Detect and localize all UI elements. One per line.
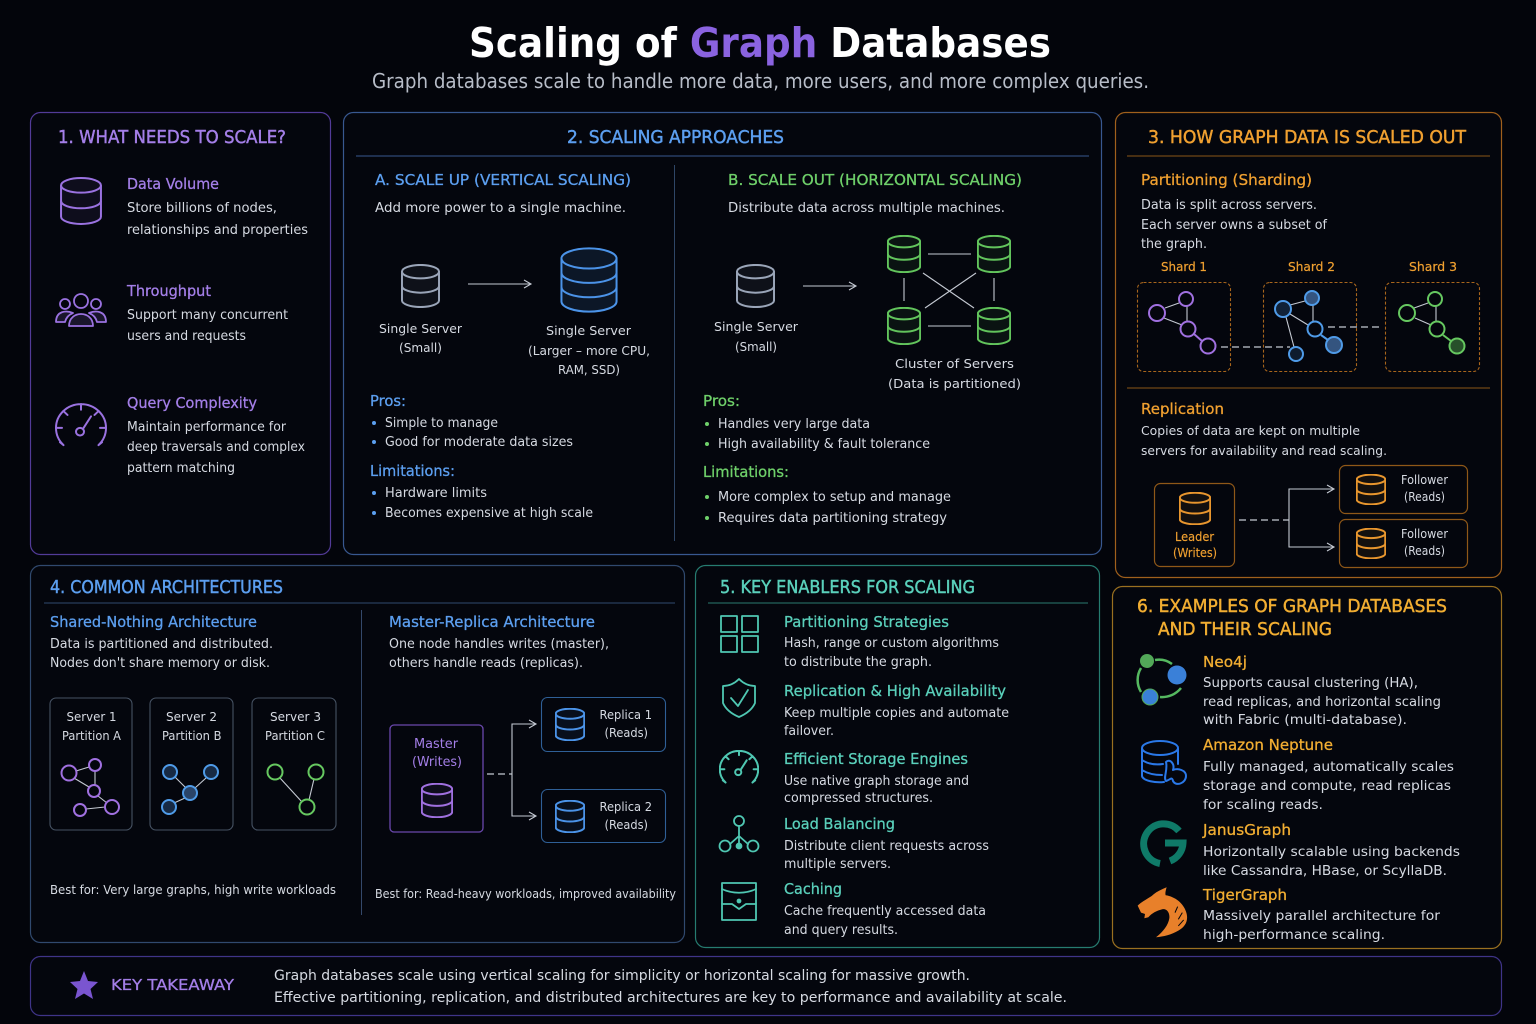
text block: query complexity [127, 394, 305, 476]
list: scale out limitations: Limitations: [703, 463, 789, 481]
node: replica 1: (Reads) [604, 725, 648, 740]
text block: storage engines: Use native graph storage and [784, 773, 969, 789]
text block: storage engines [784, 750, 969, 806]
label: cluster: Cluster of Servers [895, 356, 1014, 371]
heading: scaling approaches: 2. SCALING APPROACHES [567, 128, 784, 148]
text block: load balancing [784, 815, 989, 872]
text block: janusgraph: like Cassandra, HBase, or ScyllaDB. [1203, 863, 1447, 879]
text block: partitioning strategies: to distribute the graph. [784, 654, 932, 670]
heading: examples: 6. EXAMPLES OF GRAPH DATABASES [1137, 597, 1447, 617]
diagram: shards [1138, 259, 1480, 372]
label: large server: (Larger – more CPU, [528, 343, 650, 358]
text block: replication and HA: Replication & High Availability [784, 682, 1006, 700]
node: replica 1: Replica 1 [600, 707, 652, 722]
text block: replication and HA [784, 682, 1009, 739]
label: cluster: (Data is partitioned) [888, 376, 1021, 391]
subpanel: scale up [370, 171, 650, 521]
list: scale up limitations: Hardware limits [385, 485, 487, 501]
icon: grid [721, 616, 758, 652]
text block: caching: Cache frequently accessed data [784, 903, 986, 919]
list: scale out pros [703, 392, 930, 452]
heading: scale up: A. SCALE UP (VERTICAL SCALING) [375, 171, 631, 189]
text block: load balancing: multiple servers. [784, 856, 891, 872]
text block: throughput: Support many concurrent [127, 307, 288, 323]
graph: shard 3 [1399, 292, 1464, 354]
card: server 3 [252, 698, 336, 830]
card: server 3: Partition C [265, 728, 325, 743]
text block: throughput: Throughput [126, 282, 211, 300]
icon: tigergraph [1138, 887, 1187, 937]
list: scale up pros: Simple to manage [385, 415, 498, 431]
node: master: Master [414, 736, 458, 752]
text block: shared-nothing: Data is partitioned and distributed. [50, 636, 273, 652]
arrow: leader to followers [1239, 485, 1334, 551]
node: leader: Leader [1175, 529, 1215, 544]
text block: neo4j: Neo4j [1203, 653, 1247, 671]
diagram: leader and followers [1154, 466, 1468, 568]
node: replica 2: (Reads) [604, 817, 648, 832]
heading: examples: AND THEIR SCALING [1158, 620, 1332, 640]
text block: replication and HA: failover. [784, 723, 834, 739]
list: scale up limitations: Becomes expensive at high scale [385, 505, 593, 521]
icon: amazon neptune [1142, 741, 1186, 784]
label: small server: (Small) [399, 340, 442, 355]
panel: scaling approaches [344, 112, 1102, 554]
node: replica 2 [542, 790, 666, 842]
list: scale up limitations: Limitations: [370, 462, 455, 480]
text block: tigergraph: TigerGraph [1202, 886, 1287, 904]
icon: users [56, 294, 106, 326]
text block: master-replica: others handle reads (replicas). [389, 655, 583, 671]
list: scale out pros: High availability & fault tolerance [718, 436, 930, 452]
text block: data volume: Store billions of nodes, [127, 200, 277, 216]
text block: takeaway: Graph databases scale using vertical scaling for simplicity or horizontal scaling for massive growth. [274, 968, 970, 984]
note: master-replica best for: Best for: Read-heavy workloads, improved availability [375, 886, 677, 901]
text block: data volume [127, 175, 308, 238]
node: follower 2: Follower [1401, 527, 1448, 541]
text block: master-replica [389, 613, 609, 671]
icon: load balancer [720, 816, 758, 852]
text block: neo4j [1203, 653, 1441, 728]
list: scale up limitations [370, 462, 593, 521]
node: replica 1 [542, 698, 666, 752]
list: scale out limitations [703, 463, 951, 526]
text block: query complexity: Query Complexity [127, 394, 257, 412]
text block: replication and HA: Keep multiple copies and automate [784, 705, 1009, 721]
card: server 2 [150, 698, 233, 830]
panel: common architectures [30, 566, 684, 942]
text block: amazon neptune: Amazon Neptune [1203, 736, 1333, 754]
arrow: master to replicas [487, 720, 536, 820]
node: follower 2: (Reads) [1404, 544, 1445, 558]
text block: tigergraph: Massively parallel architecture for [1203, 908, 1440, 924]
icon: cache [722, 883, 756, 920]
text block: load balancing: Load Balancing [784, 815, 895, 833]
text block: partitioning strategies: Hash, range or custom algorithms [784, 635, 999, 651]
label: cluster [888, 356, 1021, 391]
node: master: (Writes) [412, 754, 462, 770]
list: scale up pros: Pros: [370, 392, 406, 410]
text block: partitioning: Each server owns a subset of [1141, 217, 1328, 233]
title: Scaling of Graph Databases [469, 19, 1051, 67]
heading: key takeaway: KEY TAKEAWAY [111, 976, 235, 994]
text block: partitioning: Data is split across servers. [1141, 197, 1317, 213]
icon: small server [737, 265, 774, 307]
text block: takeaway: Effective partitioning, replication, and distributed architectures are key to performance and availability at scale. [274, 990, 1067, 1006]
list: scale up pros: Good for moderate data sizes [385, 434, 573, 450]
list: scale up pros [370, 392, 573, 450]
text block: storage engines: Efficient Storage Engines [784, 750, 968, 768]
node: leader [1154, 484, 1234, 566]
heading: key enablers: 5. KEY ENABLERS FOR SCALING [720, 578, 975, 598]
card: server 2: Partition B [162, 728, 222, 743]
text block: shared-nothing: Shared-Nothing Architecture [50, 613, 257, 631]
node: follower 1: (Reads) [1404, 490, 1445, 504]
text block: load balancing: Distribute client requests across [784, 838, 989, 854]
text: scale up description: Add more power to a single machine. [375, 200, 626, 216]
text block: replication: servers for availability and read scaling. [1141, 443, 1387, 458]
text block: partitioning strategies: Partitioning Strategies [784, 613, 949, 631]
text block: partitioning [1141, 171, 1328, 252]
text block: partitioning: Partitioning (Sharding) [1141, 171, 1312, 189]
text block: neo4j: with Fabric (multi-database). [1203, 712, 1407, 728]
card: server 1 [50, 698, 132, 830]
text block: throughput: users and requests [127, 328, 246, 344]
icon: gauge [720, 751, 758, 783]
label: small server [714, 319, 799, 354]
graph: shard 2 [1275, 291, 1342, 361]
text: scale out description: Distribute data across multiple machines. [728, 200, 1005, 216]
list: scale out pros: Pros: [703, 392, 740, 410]
text block: tigergraph [1202, 886, 1440, 943]
text block: replication [1141, 400, 1387, 458]
label: small server: Single Server [714, 319, 799, 334]
label: small server [379, 321, 463, 355]
label: small server: (Small) [735, 339, 777, 354]
text block: janusgraph: Horizontally scalable using backends [1203, 844, 1460, 860]
card: server 1: Server 1 [66, 709, 116, 724]
text block: replication: Replication [1141, 400, 1224, 418]
text block: storage engines: compressed structures. [784, 790, 933, 806]
card: server 2: Server 2 [166, 709, 217, 724]
text block: neo4j: read replicas, and horizontal scaling [1203, 694, 1441, 710]
panel: key takeaway [30, 956, 1502, 1016]
icon: large server [561, 248, 617, 312]
list: scale out pros: Handles very large data [718, 416, 870, 432]
icon: gauge [56, 404, 106, 445]
icon: neo4j [1138, 654, 1186, 705]
panel: how graph data is scaled out [1116, 112, 1502, 578]
icon: shield [723, 679, 755, 717]
text block: takeaway [274, 968, 1067, 1006]
text block: caching: Caching [784, 880, 842, 898]
list: scale out limitations: More complex to setup and manage [718, 489, 951, 505]
text block: query complexity: pattern matching [127, 460, 235, 476]
node: follower 1 [1340, 466, 1468, 514]
heading: common architectures: 4. COMMON ARCHITECTURES [50, 578, 283, 598]
label: large server [528, 323, 650, 377]
text block: amazon neptune: Fully managed, automatically scales [1203, 759, 1454, 775]
text block: tigergraph: high-performance scaling. [1203, 927, 1385, 943]
text block: replication: Copies of data are kept on multiple [1141, 423, 1360, 438]
arrow: scale out [803, 282, 856, 290]
node: master [390, 725, 483, 832]
text block: amazon neptune [1203, 736, 1454, 813]
heading: examples [1137, 597, 1447, 640]
text block: partitioning: the graph. [1141, 236, 1207, 252]
diagram: server cluster [888, 236, 1010, 344]
note: shared-nothing best for: Best for: Very large graphs, high write workloads [50, 882, 336, 897]
text block: partitioning strategies [784, 613, 999, 670]
card: server 1: Partition A [62, 728, 121, 743]
text block: data volume: relationships and properties [127, 222, 308, 238]
icon: star [70, 971, 98, 999]
text block: janusgraph [1202, 821, 1460, 879]
list: scale out limitations: Requires data partitioning strategy [718, 510, 947, 526]
icon: small server [402, 265, 439, 307]
label: shard 1: Shard 1 [1161, 259, 1207, 274]
text block: master-replica: One node handles writes (master), [389, 636, 609, 652]
panel: examples of graph databases [1112, 586, 1502, 948]
label: large server: Single Server [546, 323, 632, 338]
subpanel: scale out [703, 171, 1022, 526]
node: leader: (Writes) [1173, 545, 1217, 560]
icon: database [61, 178, 101, 224]
node: follower 2 [1340, 520, 1468, 568]
text block: caching [784, 880, 986, 938]
panel: what needs to scale [30, 112, 330, 554]
node: replica 2: Replica 2 [600, 799, 652, 814]
text block: throughput [126, 282, 288, 344]
graph: shard 1 [1149, 292, 1216, 354]
text block: janusgraph: JanusGraph [1202, 821, 1291, 839]
text block: amazon neptune: for scaling reads. [1203, 797, 1323, 813]
text block: query complexity: deep traversals and complex [127, 439, 305, 455]
text block: caching: and query results. [784, 922, 898, 938]
subtitle: Graph databases scale to handle more data, more users, and more complex queries. [372, 69, 1149, 93]
text block: shared-nothing [50, 613, 273, 671]
card: server 3: Server 3 [270, 709, 321, 724]
heading: what needs to scale: 1. WHAT NEEDS TO SCALE? [58, 128, 286, 148]
text block: neo4j: Supports causal clustering (HA), [1203, 675, 1418, 691]
arrow: scale up [468, 280, 531, 288]
text block: data volume: Data Volume [127, 175, 219, 193]
label: large server: RAM, SSD) [558, 362, 620, 377]
heading: scale out: B. SCALE OUT (HORIZONTAL SCALING) [728, 171, 1022, 189]
heading: how graph data is scaled: 3. HOW GRAPH DATA IS SCALED OUT [1148, 128, 1466, 148]
icon: janusgraph [1144, 824, 1183, 864]
label: shard 3: Shard 3 [1409, 259, 1457, 274]
node: follower 1: Follower [1401, 473, 1448, 487]
text block: query complexity: Maintain performance for [127, 419, 286, 435]
text block: master-replica: Master-Replica Architecture [389, 613, 595, 631]
label: shard 2: Shard 2 [1288, 259, 1335, 274]
text block: amazon neptune: storage and compute, read replicas [1203, 778, 1451, 794]
text block: shared-nothing: Nodes don't share memory or disk. [50, 655, 270, 671]
panel: key enablers [696, 566, 1100, 948]
label: small server: Single Server [379, 321, 463, 336]
